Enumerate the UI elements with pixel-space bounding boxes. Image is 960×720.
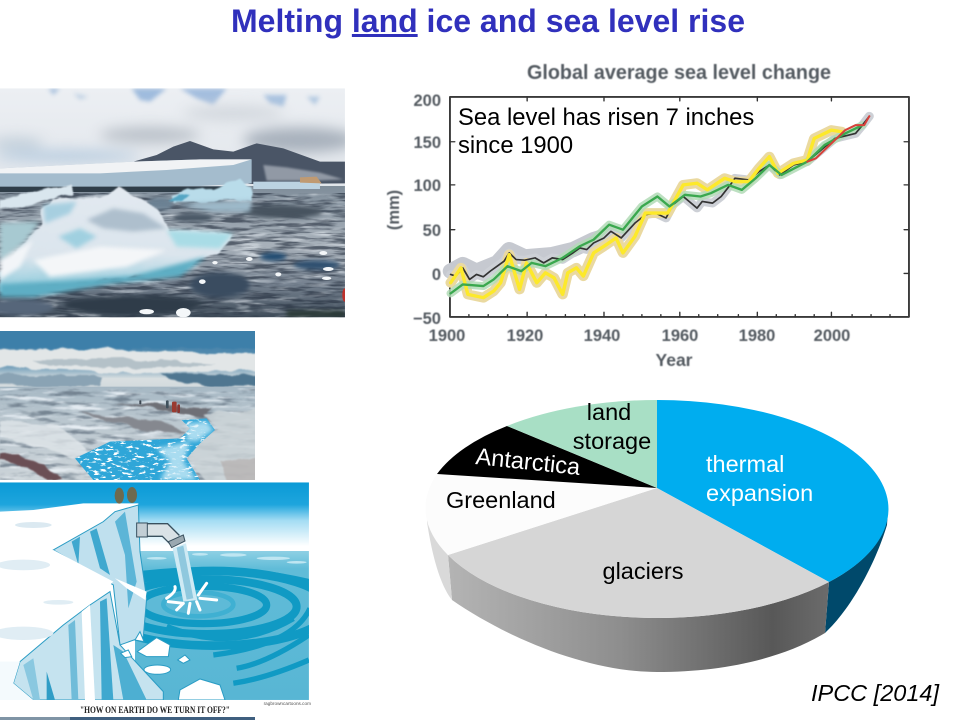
pie side walls [427,509,888,672]
slice: Greenland [425,474,657,555]
cartoon credit: ragbrowncartoons.com [264,701,311,706]
slice: land storage [507,400,657,488]
photo: meltwater river on ice sheet [0,328,262,487]
title: Melting land ice and sea level rise [231,3,745,39]
x axis labels [429,327,850,345]
y axis labels: 50 [423,222,441,240]
slice: glaciers [448,488,829,618]
y axis labels: 0 [432,266,441,284]
label: thermal expansion: expansion [706,480,813,506]
green tide gauge line [451,125,862,293]
3D pie chart: sea level rise contributions [425,399,888,672]
label: glaciers: glaciers [603,558,683,584]
y axis labels: 100 [413,177,441,195]
x axis labels: 1940 [584,327,620,345]
slice: Antarctica [437,426,657,488]
chart annotation [458,104,754,159]
label: thermal expansion: thermal [706,451,784,477]
plot frame and data lines [450,97,909,317]
x axis labels: 2000 [814,327,850,345]
photo strip at bottom edge [0,717,255,720]
y axis labels: −50 [413,310,441,328]
red satellite altimetry line [807,116,869,162]
uncertainty bands [451,116,869,298]
label: land storage [573,399,651,454]
label: Antarctica: Antarctica [474,444,582,481]
photo: glacier front and icebergs [0,88,357,317]
yellow tide gauge line [451,130,842,298]
label: Greenland: Greenland [446,487,556,513]
black tide gauge line [451,116,869,279]
label: land storage: storage [573,428,651,454]
chart annotation: Sea level has risen 7 inches [458,104,754,131]
y axis labels [413,92,441,328]
cartoon: faucet pouring from the ice cliff [0,482,330,715]
y axis labels: 200 [413,92,441,110]
label: thermal expansion [706,451,813,506]
figures on the cliff [115,487,137,504]
y axis labels: 150 [413,134,441,152]
slice: thermal expansion [657,400,888,582]
label: land storage: land [587,399,631,425]
source citation: IPCC [2014] [811,680,939,706]
cartoon caption: "HOW ON EARTH DO WE TURN IT OFF?" [80,705,230,715]
x axis labels: 1920 [507,327,543,345]
x axis labels: 1900 [429,327,465,345]
x axis title: Year [656,350,693,370]
y axis title: (mm) [385,190,403,230]
x axis labels: 1980 [739,327,775,345]
ice cliff [0,503,163,700]
chart: global average sea level change [385,61,909,370]
x axis labels: 1960 [662,327,698,345]
sea with ripples [135,551,309,700]
faucet pipe [137,523,217,613]
chart title: Global average sea level change [527,61,831,84]
ice floes [121,632,225,700]
chart annotation: since 1900 [458,132,573,159]
